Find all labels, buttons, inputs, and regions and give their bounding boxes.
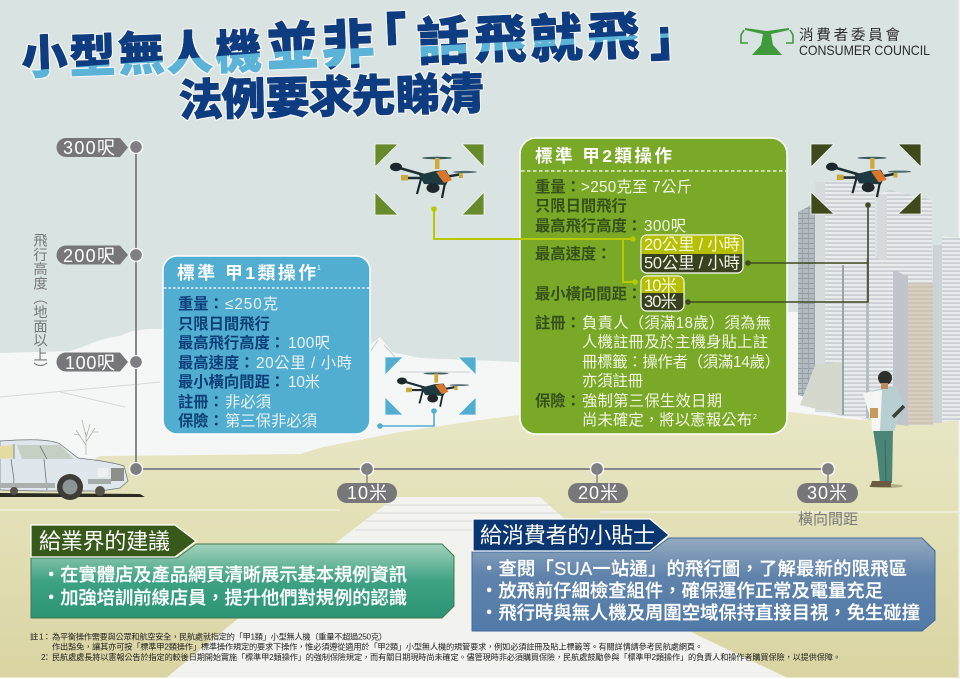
icon: scale — [741, 28, 793, 55]
rule list: 重量： — [178, 295, 224, 313]
panel heading: 標準 甲1類操作 — [177, 262, 316, 283]
logo: Consumer Council — [741, 27, 930, 58]
speed comparison box: 50公里 / 小時 — [644, 254, 740, 272]
chart axes: altitude and lateral distance — [56, 138, 858, 503]
rule list: 2 — [753, 414, 757, 421]
tips list: ・飛行時與無人機及周圍空域保持直接目視，免生碰撞 — [480, 602, 920, 623]
advice list: ・在實體店及產品網頁清晰展示基本規例資訊 — [42, 564, 407, 585]
rule list: 最高飛行高度： — [178, 334, 285, 352]
illustration: man with plans — [863, 371, 905, 488]
rule list: 只限日間飛行 — [535, 198, 627, 215]
heading tag: 給消費者的小貼士 — [480, 523, 655, 548]
distance comparison box — [641, 276, 684, 311]
rule list: 註冊： — [535, 314, 581, 332]
rule list: 非必須 — [225, 394, 271, 411]
panel heading: 標準 甲2類操作 — [535, 146, 672, 166]
rule list — [178, 295, 352, 430]
advice list: ・加強培訓前線店員，提升他們對規例的認識 — [42, 587, 407, 608]
rule list: 重量： — [535, 178, 581, 196]
rule list: 10米 — [288, 374, 320, 391]
tips list: ・查閱「SUA一站通」的飛行圖，了解最新的限飛區 — [480, 558, 907, 579]
distance comparison box: 30米 — [644, 292, 677, 311]
rule list: >250克至 7公斤 — [581, 179, 692, 196]
rule list: 註冊： — [178, 393, 224, 411]
heading tag — [473, 519, 669, 551]
footnotes: 作出豁免，讓其亦可按「標準甲2類操作」標準操作規定的要求下操作，惟必須遵從適用於「甲2類」小型無人機的規管要求，例如必須註冊及貼上標籤等。有關詳情請參考民航處網頁。 — [52, 642, 703, 652]
heading tag — [31, 525, 196, 557]
rule list: 負責人（須滿18歲）須為無 — [582, 315, 771, 332]
rule list: 保險： — [178, 412, 224, 430]
panel: standard category A2 — [520, 138, 787, 434]
rule list: 300呎 — [644, 218, 686, 235]
panel: tips for consumers — [472, 519, 935, 631]
speed comparison box — [641, 235, 743, 273]
distance comparison box: 10米 — [644, 276, 677, 295]
panel: standard category A1 — [163, 256, 370, 434]
altitude tag: 100 — [56, 352, 128, 373]
icon: dark framed drone — [811, 144, 921, 214]
rule list — [535, 178, 780, 429]
altitude tag: 300: 300呎 — [63, 138, 115, 158]
illustration: tree — [74, 420, 99, 455]
connector: A2 limits to visual line of sight drone — [431, 206, 638, 285]
footnotes: 為平衡操作需要與公眾和航空安全，民航處就指定的「甲1類」小型無人機（重量不超過250克） — [52, 632, 387, 642]
title: 法例要求先睇清 — [178, 70, 484, 126]
rule list: 100呎 — [288, 335, 330, 352]
title: 小型無人機 — [21, 25, 262, 84]
rule list: 只限日間飛行 — [178, 316, 270, 333]
rule list: 最小橫向間距： — [535, 286, 642, 303]
rule list: 尚未確定，將以憲報公布 — [582, 411, 752, 429]
panel: advice for trade — [31, 525, 454, 618]
panel: standard category A1: 1 — [317, 265, 321, 272]
altitude tag: 200: 200呎 — [63, 246, 115, 266]
axis label: altitude: 飛行高度（地面以上） — [31, 233, 47, 376]
heading tag: 給業界的建議 — [39, 529, 170, 554]
connector: A2 limits to far drone — [685, 202, 871, 305]
advice list — [42, 564, 407, 608]
rule list: 第三保非必須 — [225, 412, 317, 430]
rule list: 人機註冊及於主機身貼上註 — [582, 334, 768, 351]
illustration: car — [0, 440, 145, 500]
rule list: 亦須註冊 — [582, 373, 643, 390]
rule list: 強制第三保生效日期 — [582, 392, 722, 410]
distance pill: 10 — [337, 483, 397, 503]
footnotes: 註 1： — [30, 632, 51, 642]
title — [21, 8, 702, 126]
icon: blue framed drone — [385, 357, 476, 415]
rule list: 保險： — [535, 392, 581, 410]
tips list — [480, 558, 920, 623]
icon: green framed drone — [375, 144, 484, 215]
distance pill: 20 — [568, 483, 628, 503]
footnotes: 民航處處長將以憲報公告於指定的較後日期開始實施「標準甲2類操作」的強制保險規定，而有關日期現時尚未確定。儘管現時非必須購買保險，民航處鼓勵參與「標準甲2類操作」的負責人和操作者購買保險，以提供保障。 — [52, 652, 841, 662]
logo: Consumer Council: CONSUMER COUNCIL — [799, 42, 930, 58]
rule list: 冊標籤：操作者（須滿14歲） — [582, 354, 780, 371]
rule list: 20公里 / 小時 — [256, 355, 352, 372]
rule list: ≤250克 — [225, 296, 278, 313]
altitude tag: 100: 100呎 — [65, 353, 115, 373]
tips list: ・放飛前仔細檢查組件，確保運作正常及電量充足 — [480, 580, 883, 601]
buildings — [798, 180, 960, 426]
distance pill: 20: 20米 — [578, 483, 618, 503]
speed comparison box: 20公里 / 小時 — [644, 235, 740, 254]
footnotes: 2： — [41, 653, 51, 662]
rule list: 最高飛行高度： — [535, 217, 642, 235]
axis label: lateral distance: 橫向間距 — [798, 511, 858, 528]
rule list: 最高速度： — [535, 245, 612, 263]
distance pill: 30: 30米 — [807, 483, 847, 503]
distance pill: 10: 10米 — [347, 483, 387, 503]
rule list: 最高速度： — [178, 354, 254, 372]
title: 並非「話飛就飛」 — [265, 8, 702, 78]
distance pill: 30 — [797, 483, 858, 503]
footnotes — [30, 632, 841, 662]
logo: Consumer Council: 消費者委員會 — [799, 27, 900, 44]
connector: A1 drone — [377, 408, 437, 429]
rule list: 最小橫向間距： — [178, 374, 285, 391]
